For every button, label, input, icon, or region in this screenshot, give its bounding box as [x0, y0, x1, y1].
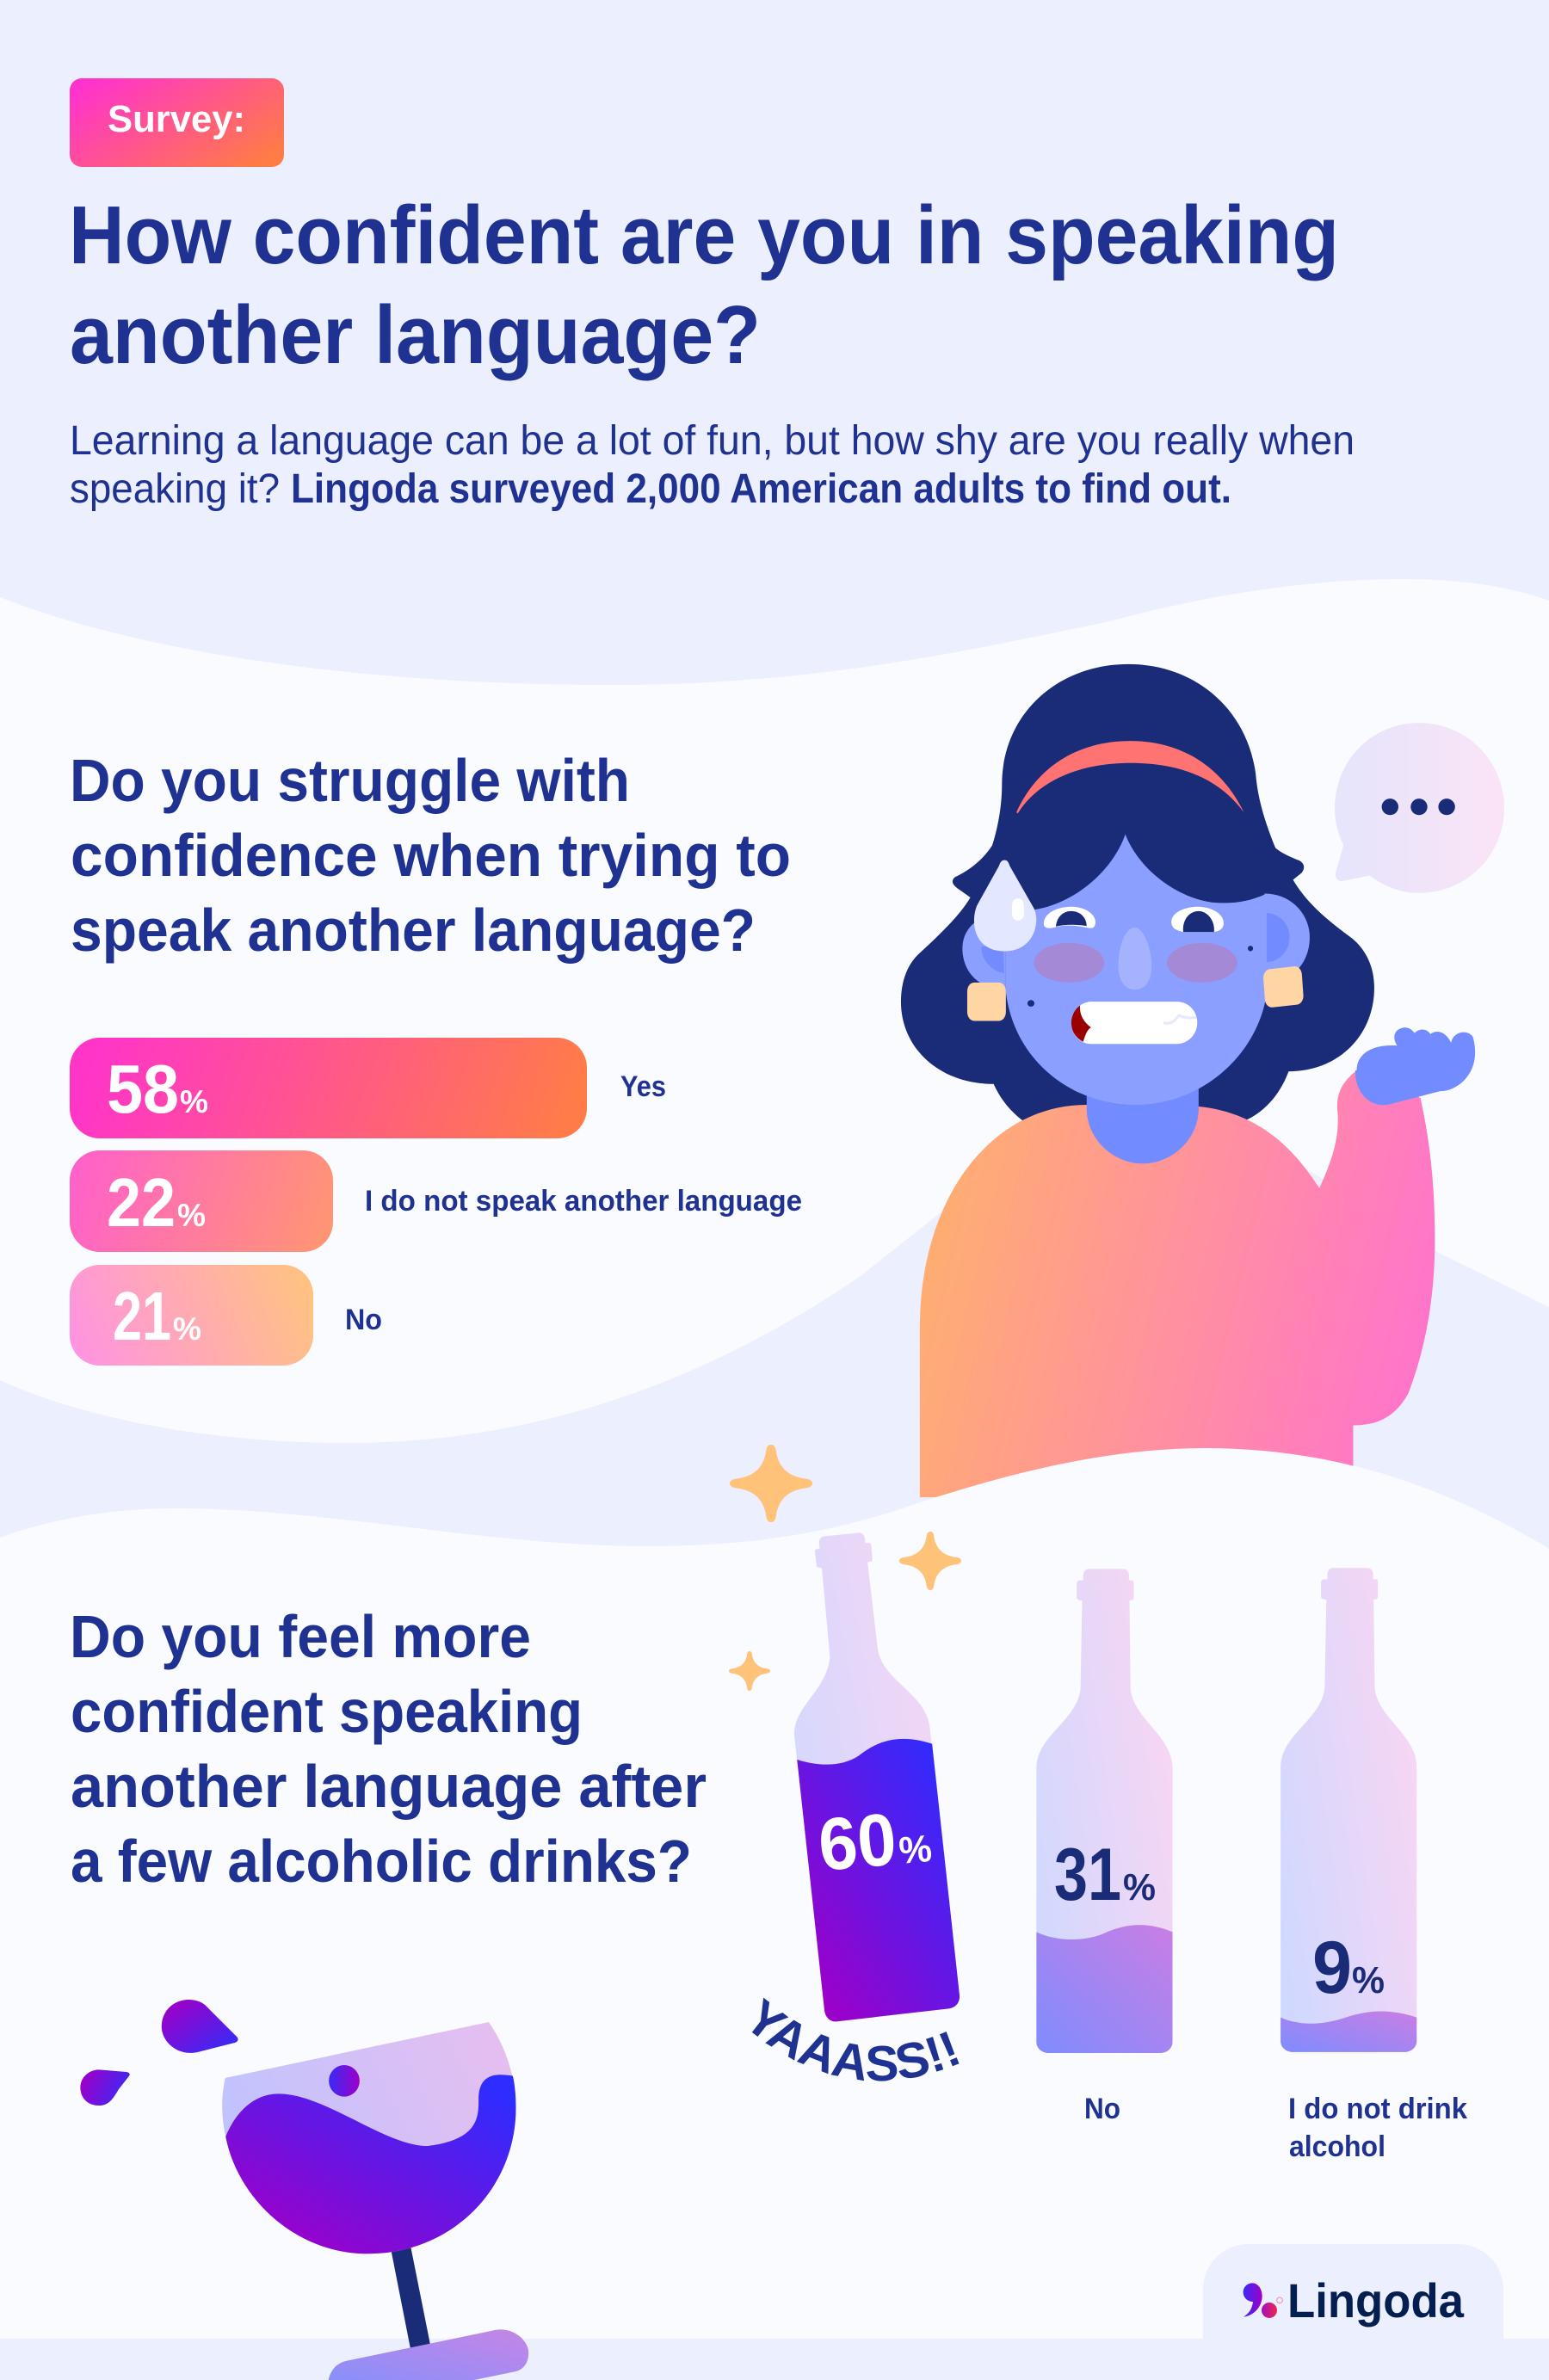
bar: 21% no: 21 [113, 1278, 171, 1354]
bar: 22% do not speak: 22 [107, 1164, 176, 1241]
question 1 heading: speak another language? [71, 897, 756, 964]
logo tab [1203, 2244, 1503, 2339]
neck [1087, 1076, 1199, 1163]
lower wave over sweater [706, 1448, 1549, 1635]
question 2 heading: another language after [71, 1753, 707, 1820]
bar chart: struggle with confidence [70, 1038, 802, 1366]
splash small [80, 2069, 130, 2106]
bottle: 9% do not drink [1281, 1568, 1467, 2163]
bar: 22% do not speak: % [177, 1198, 206, 1233]
base [329, 2329, 528, 2380]
bar: 21% no: % [173, 1311, 201, 1347]
sweat drop [974, 860, 1036, 951]
intro text: Lingoda surveyed 2,000 American adults to find out. [291, 466, 1231, 512]
question 2 heading: Do you feel more [70, 1603, 531, 1670]
title [69, 189, 1339, 381]
face [1005, 835, 1267, 1105]
illustration: nervous woman [901, 664, 1504, 1497]
exclamation: YAAASS!!: YAAASS!! [752, 1998, 959, 2081]
earrings [967, 965, 1304, 1020]
intro text: Learning a language can be a lot of fun, but how shy are you really when [70, 418, 1355, 464]
intro text [70, 418, 1355, 512]
bowl [222, 2022, 515, 2254]
bar: 21% no: No [345, 1304, 382, 1336]
survey badge [70, 78, 284, 167]
sparkles [729, 1445, 961, 1691]
intro text: speaking it? [70, 466, 280, 512]
question 2 heading: confident speaking [71, 1678, 583, 1745]
bottle: 9% do not drink: alcohol [1289, 2130, 1385, 2163]
eyes [1044, 907, 1224, 932]
question 1 heading: Do you struggle with [70, 747, 630, 814]
title: another language? [70, 289, 761, 381]
bar: 58% yes: 58 [107, 1051, 179, 1127]
title: How confident are you in speaking [69, 189, 1339, 281]
bottle: 31% no [1036, 1569, 1172, 2125]
survey badge: Survey: [108, 98, 245, 140]
bottle: 9% do not drink: % [1352, 1959, 1385, 2001]
question 1 heading [70, 747, 791, 964]
headband [1016, 741, 1244, 813]
bottle: 9% do not drink: 9 [1312, 1927, 1352, 2009]
bottle: 31% no: 31 [1054, 1834, 1121, 1916]
bar: 21% no [70, 1265, 382, 1366]
droplet in glass [329, 2065, 360, 2097]
bar: 58% yes: % [180, 1084, 208, 1119]
hair [901, 664, 1374, 1122]
mouth [1071, 1002, 1197, 1044]
illustration: tipping wine glass [80, 2000, 528, 2380]
blush [1034, 943, 1237, 983]
speech bubble [1335, 723, 1504, 893]
splash large [162, 2000, 238, 2053]
panel: header [69, 78, 1355, 512]
hand [1355, 1027, 1475, 1105]
question 2 heading: a few alcoholic drinks? [71, 1828, 692, 1895]
logo mark [1244, 2283, 1282, 2318]
wine [225, 2075, 515, 2254]
bottle: 60% yes [794, 1532, 960, 2021]
bar: 58% yes: Yes [620, 1070, 666, 1103]
moles [1028, 946, 1253, 1007]
bar: 22% do not speak [70, 1150, 802, 1252]
stem [391, 2246, 430, 2349]
bottle: 60% yes: % [898, 1828, 934, 1872]
bottle: 60% yes: 60 [815, 1797, 899, 1887]
bar: 22% do not speak: I do not speak another language [365, 1185, 802, 1218]
bottle: 31% no: No [1084, 2093, 1120, 2125]
ears [962, 893, 1310, 988]
sweater [920, 1070, 1435, 1497]
bottle: 31% no: % [1123, 1866, 1156, 1908]
nose [1118, 928, 1151, 990]
logo wordmark: Lingoda [1287, 2273, 1465, 2328]
bar: 58% yes [70, 1038, 666, 1138]
bottle: 9% do not drink: I do not drink [1288, 2093, 1467, 2125]
question 1 heading: confidence when trying to [71, 822, 791, 889]
question 2 heading [70, 1603, 707, 1895]
